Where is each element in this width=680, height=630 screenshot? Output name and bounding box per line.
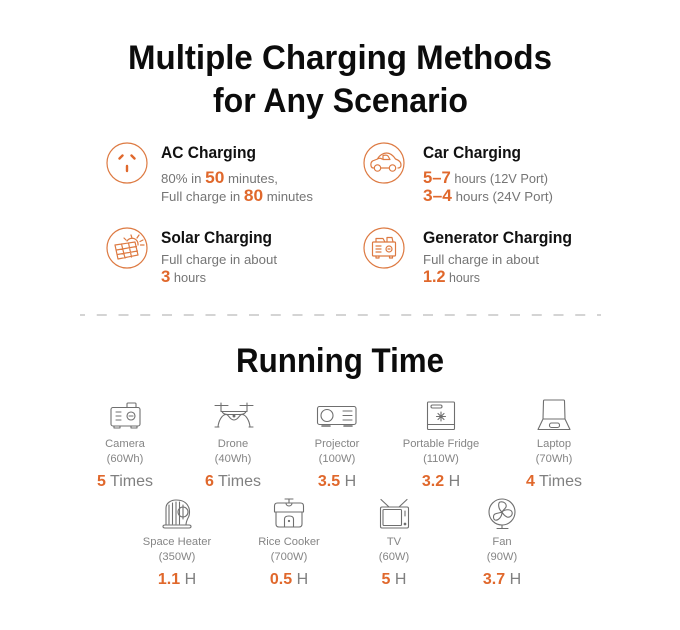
item: TV <box>379 500 409 588</box>
value: 3.7 H <box>483 571 521 588</box>
title <box>128 39 552 120</box>
title: Multiple Charging Methods <box>128 39 552 77</box>
item: space heater <box>143 500 211 588</box>
icon: drone <box>215 403 253 427</box>
text: AC charging times <box>161 168 313 205</box>
panel: car charging <box>364 143 553 205</box>
item: camera <box>97 403 153 490</box>
heading: AC Charging: AC Charging <box>161 144 256 162</box>
text: car charging times <box>423 168 553 205</box>
value: 3.2 H <box>422 473 460 490</box>
item: laptop <box>526 400 582 490</box>
value: 1.1 H <box>158 571 196 588</box>
icon: car <box>364 143 404 183</box>
icon: space heater <box>163 500 191 528</box>
value: 5 Times <box>97 473 153 490</box>
icon: camera <box>111 403 140 428</box>
icon: rice cooker <box>274 499 304 527</box>
text: generator charging time: 1.2 hours <box>423 267 480 286</box>
heading: Generator Charging: Generator Charging <box>423 229 572 247</box>
value: 5 H <box>382 571 406 588</box>
label: Fan <box>492 536 512 548</box>
label: (700W) <box>271 551 308 563</box>
text: solar charging time <box>161 252 277 286</box>
label: (350W) <box>159 551 196 563</box>
text: generator charging time <box>423 252 539 286</box>
value: 6 Times <box>205 473 261 490</box>
text: AC charging times: Full charge in 80 minutes <box>161 186 313 205</box>
text: generator charging time: Full charge in about <box>423 252 539 267</box>
label: Portable Fridge <box>403 438 479 450</box>
item: fan <box>483 499 521 588</box>
title: for Any Scenario <box>213 82 468 120</box>
panel: generator charging <box>364 228 572 286</box>
label: (100W) <box>319 453 356 465</box>
heading: Solar Charging: Solar Charging <box>161 229 272 247</box>
text: AC charging times: 80% in 50 minutes, <box>161 168 278 187</box>
label: Rice Cooker <box>258 536 320 548</box>
icon: fridge <box>428 402 454 430</box>
value: 3.5 H <box>318 473 356 490</box>
label: Drone <box>218 438 248 450</box>
label: (90W) <box>487 551 517 563</box>
value: 0.5 H <box>270 571 308 588</box>
label: Projector <box>315 438 360 450</box>
icon: laptop <box>538 400 570 430</box>
icon: generator <box>364 228 404 268</box>
icon: solar panel <box>107 228 147 268</box>
item: projector <box>315 406 360 490</box>
label: Space Heater <box>143 536 211 548</box>
label: (40Wh) <box>215 453 252 465</box>
label: TV <box>387 536 402 548</box>
item: rice cooker <box>258 499 320 588</box>
label: (60W) <box>379 551 409 563</box>
value: 4 Times <box>526 473 582 490</box>
label: Laptop <box>537 438 571 450</box>
panel: solar charging <box>107 228 277 286</box>
label: Camera <box>105 438 146 450</box>
text: car charging times: 3–4 hours (24V Port) <box>423 186 553 205</box>
text: solar charging time: 3 hours <box>161 267 206 286</box>
item: drone <box>205 403 261 490</box>
label: (70Wh) <box>536 453 573 465</box>
heading: Car Charging: Car Charging <box>423 144 521 162</box>
label: (110W) <box>423 453 459 465</box>
icon: fan <box>489 499 515 528</box>
text: solar charging time: Full charge in about <box>161 252 277 267</box>
panel: AC charging <box>107 143 313 205</box>
icon: AC socket <box>107 143 147 183</box>
text: car charging times: 5–7 hours (12V Port) <box>423 168 548 187</box>
icon: TV <box>380 500 408 528</box>
icon: projector <box>318 406 356 426</box>
label: (60Wh) <box>107 453 144 465</box>
item: portable fridge <box>403 402 479 490</box>
heading: Running Time: Running Time <box>236 342 444 380</box>
